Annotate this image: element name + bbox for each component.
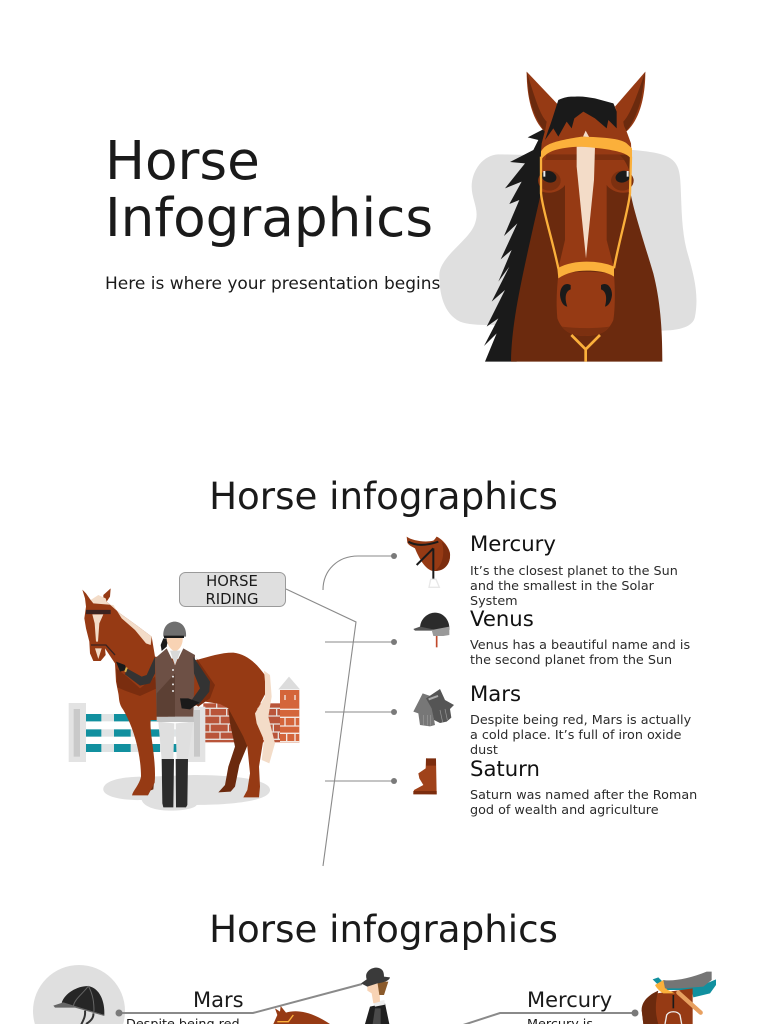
section heading: horse riding: Horse infographics bbox=[209, 474, 558, 518]
text: Saturn bbox=[470, 756, 697, 818]
title bbox=[105, 130, 433, 249]
shirt bbox=[170, 651, 181, 666]
rider bbox=[116, 622, 215, 807]
brick wall bbox=[203, 677, 300, 743]
head bbox=[167, 637, 183, 652]
text: Saturn: Saturn was named after the Roman bbox=[470, 788, 697, 803]
text: Mars: dust bbox=[470, 743, 498, 758]
rider legs bbox=[158, 722, 193, 760]
text: Mercury bbox=[527, 988, 612, 1024]
title: Infographics bbox=[105, 187, 433, 249]
text: Mercury: System bbox=[470, 594, 518, 609]
icon: gloves bbox=[413, 689, 454, 726]
text: Venus: Venus bbox=[470, 606, 534, 631]
neck bbox=[511, 190, 662, 362]
text: Mercury: Mercury bbox=[527, 988, 612, 1012]
callout: horse riding: RIDING bbox=[206, 591, 258, 608]
text: Venus: the second planet from the Sun bbox=[470, 653, 672, 668]
callout: horse riding: HORSE bbox=[206, 573, 258, 590]
illustration: horse head bbox=[439, 72, 696, 362]
text: Mars: a cold place. It’s full of iron oxide bbox=[470, 728, 682, 743]
icon: helmet bbox=[413, 613, 449, 647]
gray blob backdrop bbox=[439, 149, 696, 331]
mane bbox=[484, 128, 545, 362]
jump fence bbox=[69, 703, 205, 762]
eyes bbox=[538, 169, 634, 191]
arm shadows bbox=[116, 658, 215, 707]
text: Mars bbox=[470, 681, 692, 758]
connector: Mars bbox=[116, 984, 362, 1016]
ground shadow bbox=[103, 775, 270, 811]
rider hair bbox=[161, 638, 168, 651]
dark cheeks bbox=[542, 185, 630, 268]
illustration: horse head and rider bbox=[273, 968, 390, 1024]
icon: saddle bbox=[407, 537, 450, 587]
ears bbox=[527, 72, 558, 132]
text: Mercury bbox=[470, 531, 678, 609]
horse tail bbox=[255, 671, 275, 763]
text: Mars bbox=[126, 988, 244, 1024]
gloves bbox=[116, 662, 199, 709]
text: Mars: Mars bbox=[470, 681, 521, 706]
text: Mercury: Mercury bbox=[470, 531, 556, 556]
text: Venus bbox=[470, 606, 690, 668]
horse body bbox=[82, 588, 267, 797]
title: Horse bbox=[105, 130, 260, 192]
text: Mars: Mars bbox=[193, 988, 244, 1012]
buttons bbox=[172, 669, 174, 692]
text: Mercury: It’s the closest planet to the Sun bbox=[470, 564, 678, 579]
icon: boot bbox=[413, 758, 437, 794]
forelock bbox=[545, 96, 617, 140]
far legs bbox=[147, 708, 248, 792]
text: Mercury: and the smallest in the Solar bbox=[470, 579, 655, 594]
boots bbox=[162, 759, 188, 807]
arms bbox=[125, 657, 210, 705]
muzzle bbox=[557, 272, 615, 336]
connector lines bbox=[286, 553, 397, 866]
nostrils bbox=[560, 284, 612, 307]
face bbox=[540, 103, 632, 268]
text: Saturn: Saturn bbox=[470, 756, 540, 781]
section heading: second infographic: Horse infographics bbox=[209, 907, 558, 951]
mane bbox=[91, 595, 152, 645]
illustration: rider and horse bbox=[69, 588, 300, 811]
subtitle: Here is where your presentation begins bbox=[105, 274, 440, 294]
connector: Mercury bbox=[460, 1010, 638, 1024]
text: Mars: Despite being red, Mars is actually bbox=[470, 713, 692, 728]
head blaze bbox=[92, 614, 103, 659]
callout: horse riding bbox=[180, 572, 286, 608]
text: Venus: Venus has a beautiful name and is bbox=[470, 638, 690, 653]
circle icon: riding helmet bbox=[33, 965, 125, 1024]
bridle bbox=[86, 612, 115, 655]
blaze bbox=[577, 147, 595, 258]
illustration: saddle bbox=[642, 972, 716, 1024]
text: Saturn: god of wealth and agriculture bbox=[470, 803, 659, 818]
vest bbox=[155, 648, 195, 717]
bridle bbox=[541, 137, 632, 362]
